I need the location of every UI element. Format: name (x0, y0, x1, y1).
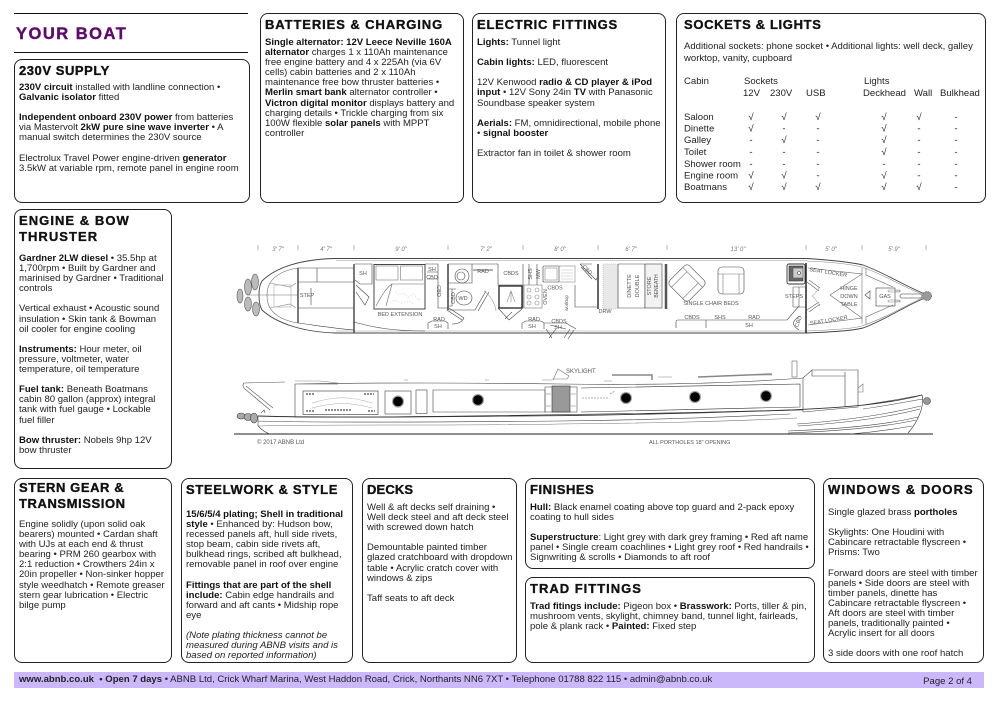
panel: 230V supply: Electrolux Travel Power engine-driven generator (19, 153, 226, 164)
panel: batteries and charging: free engine battery and 4 x 225Ah (via 6V (265, 57, 441, 68)
table: sockets and lights by cabin: 230V (770, 88, 793, 99)
panel: stern gear and transmission: stern gear lubrication • Electric (19, 590, 148, 601)
panel: steelwork and style: measured during ABNB visits and is (186, 640, 338, 651)
panel: steelwork and style: Fittings that are part of the shell (186, 580, 331, 591)
panel: stern gear and transmission: 2:1 reduction • Crowthers 24in x (19, 559, 154, 570)
panel: decks: Demountable painted timber (367, 542, 487, 553)
table: sockets and lights by cabin: - (954, 124, 958, 134)
floor plan: RAD (433, 317, 445, 323)
floor plan: SEAT LOCKER (810, 315, 848, 327)
panel: engine and bow thruster: oil cooler for engine cooling (19, 324, 135, 335)
panel: electric fittings: Soundbase speaker system (477, 98, 595, 109)
panel: engine and bow thruster: Gardner 2LW diesel • 35.5hp at (19, 253, 157, 264)
panel: engine and bow thruster: Fuel tank: Beneath Boatmans (19, 384, 148, 395)
table: sockets and lights by cabin: - (782, 147, 786, 158)
floor plan: CBDS (503, 271, 519, 277)
footer bar: www.abnb.co.uk • Open 7 days • ABNB Ltd, Crick Wharf Marina, West Haddon Road, Crick, Northants NN6 7XT • Telephone 01788 822 115 • admin@abnb.co.uk (19, 674, 712, 685)
floor plan: BED EXTENSION (378, 312, 422, 318)
panel: windows and doors: Cabincare retractable flyscreen • (828, 537, 966, 548)
table: sockets and lights by cabin: √ (916, 182, 922, 193)
panel: batteries and charging: charging details • Trickle charging from six (265, 108, 443, 119)
table: sockets and lights by cabin: √ (881, 170, 887, 182)
panel: engine and bow thruster: tank with fuel gauge • Lockable (19, 404, 151, 415)
panel: decks: Taff seats to aft deck (367, 593, 454, 604)
floor plan: DRW (598, 309, 612, 315)
table: sockets and lights by cabin: - (954, 147, 958, 158)
table: sockets and lights by cabin: - (917, 159, 921, 170)
floor plan: TABLE (840, 302, 858, 308)
table: sockets and lights by cabin: - (954, 112, 958, 123)
panel: engine and bow thruster: Vertical exhaust • Acoustic sound (19, 303, 159, 314)
panel: engine and bow thruster (14, 209, 172, 469)
panel: stern gear and transmission: with UJs at each end & thrust (19, 539, 143, 550)
side elevation: ALL PORTHOLES 18" OPENING (649, 440, 730, 446)
dimension ruler: 13' 0" (731, 247, 746, 253)
panel: trad fittings: pole & plank rack • Painted: Fixed step (530, 621, 696, 632)
table: sockets and lights by cabin: - (954, 182, 958, 193)
panel: electric fittings: 12V Kenwood radio & CD player & iPod (477, 77, 652, 88)
table: sockets and lights by cabin: USB (806, 88, 826, 99)
panel: steelwork and style: (Note plating thickness cannot be (186, 630, 327, 641)
dimension ruler: 9' 0" (395, 247, 408, 253)
title: your boat: YOUR BOAT (16, 25, 127, 43)
table: sockets and lights by cabin: - (882, 159, 886, 170)
panel: steelwork and style: bulkhead rings, scribed aft bulkhead, (186, 549, 342, 560)
panel: stern gear and transmission (14, 478, 172, 663)
floor plan: STEPS (785, 294, 803, 300)
panel: electric fittings: ELECTRIC FITTINGS (477, 17, 618, 32)
panel: engine and bow thruster: insulation • Skin tank & Bowman (19, 314, 156, 325)
panel: finishes: FINISHES (530, 482, 594, 497)
footer bar: Page 2 of 4 (923, 676, 972, 687)
footer bar (14, 672, 984, 688)
table: sockets and lights by cabin: - (782, 159, 786, 170)
panel: engine and bow thruster: temperature, oil temperature (19, 364, 139, 375)
floor plan: DOWN (840, 294, 858, 300)
table: sockets and lights by cabin: - (954, 135, 958, 146)
table: sockets and lights by cabin: - (917, 147, 921, 158)
table: sockets and lights by cabin: - (954, 170, 958, 182)
dimension ruler: 3' 7" (272, 247, 285, 253)
floor plan: RAD (477, 269, 489, 275)
panel: finishes: Hull: Black enamel coating above top guard and 2-pack epoxy (530, 502, 794, 513)
panel: trad fittings: Trad fitings include: Pigeon box • Brasswork: Ports, tiller & pin, (530, 601, 807, 612)
panel: stern gear and transmission: TRANSMISSION (19, 496, 126, 511)
panel: steelwork and style: recessed panels aft, hull side rivets, (186, 529, 337, 540)
panel: decks: with screwed down hatch (367, 522, 474, 533)
table: sockets and lights by cabin: √ (881, 147, 887, 158)
table: sockets and lights by cabin: Galley (684, 135, 711, 146)
panel: sockets and lights: worktop, vanity, cupboard (684, 53, 792, 64)
floor plan: SH (554, 325, 562, 331)
panel: stern gear and transmission: Engine solidly (upon solid oak (19, 519, 145, 530)
table: sockets and lights by cabin: - (749, 135, 753, 146)
panel: sockets and lights (676, 13, 986, 203)
table: sockets and lights by cabin: Saloon (684, 112, 714, 123)
dimension ruler: 6' 7" (625, 247, 638, 253)
panel: 230V supply: 230V SUPPLY (19, 63, 110, 78)
table: sockets and lights by cabin: √ (916, 112, 922, 123)
table: sockets and lights by cabin (684, 76, 980, 193)
panel: batteries and charging: Merlin smart bank alternator controller • (265, 87, 438, 98)
table: sockets and lights by cabin: √ (748, 112, 754, 123)
table: sockets and lights by cabin: √ (748, 170, 754, 182)
table: sockets and lights by cabin: √ (748, 124, 754, 134)
table: sockets and lights by cabin: - (816, 124, 820, 134)
panel: trad fittings: mushroom vents, skylight, chimney band, tunnel light, fairleads, (530, 611, 798, 622)
floor plan: CBD (435, 285, 441, 297)
side elevation: SKYLIGHT (566, 369, 596, 375)
floor plan: CBD (451, 292, 457, 304)
dimension ruler: 7' 2" (480, 247, 493, 253)
panel: steelwork and style (181, 478, 353, 663)
panel: stern gear and transmission: style weedhatch • Remote greaser (19, 580, 165, 591)
table: sockets and lights by cabin: - (816, 159, 820, 170)
panel: windows and doors: Cabincare retractable flyscreen • (828, 598, 966, 609)
panel: engine and bow thruster: marinised by Gardner • Traditional (19, 273, 164, 284)
dimension ruler: 5' 0" (825, 247, 838, 253)
panel: steelwork and style: forward and aft cants • Midship rope (186, 600, 338, 611)
panel: engine and bow thruster: controls (19, 283, 52, 294)
table: sockets and lights by cabin: - (917, 170, 921, 182)
panel: steelwork and style: based on reported information) (186, 650, 317, 661)
floor plan: GAS (879, 294, 891, 300)
floor plan: CBD (580, 264, 593, 277)
table: sockets and lights by cabin: - (816, 147, 820, 158)
table: sockets and lights by cabin: Wall (914, 88, 932, 99)
panel: windows and doors: panels, traditionally painted • (828, 618, 950, 629)
panel: engine and bow thruster: ENGINE & BOW (19, 213, 130, 228)
floor plan: MW (536, 268, 542, 279)
panel: batteries and charging: cells) cabin batteries and 2 x 110Ah (265, 67, 416, 78)
panel: windows and doors: Prisms: Two (828, 547, 880, 558)
panel: electric fittings: Lights: Tunnel light (477, 37, 560, 48)
dimension ruler (258, 245, 926, 253)
table: sockets and lights by cabin: Lights (864, 76, 890, 87)
table: sockets and lights by cabin: 12V (743, 88, 761, 99)
panel: electric fittings: Aerials: FM, omnidirectional, mobile phone (477, 118, 661, 129)
table: sockets and lights by cabin: √ (815, 182, 821, 193)
table: sockets and lights by cabin: Cabin (684, 76, 709, 87)
panel: batteries and charging: alternator charges 1 x 110Ah maintenance (265, 47, 448, 58)
panel: stern gear and transmission: 20in propeller • Non-sinker hopper (19, 569, 164, 580)
table: sockets and lights by cabin: - (816, 170, 820, 182)
panel: electric fittings: input • 12V Sony 24in TV with Panasonic (477, 87, 653, 98)
panel: steelwork and style: STEELWORK & STYLE (186, 482, 338, 497)
panel: windows and doors: Single glazed brass portholes (828, 507, 957, 518)
table: sockets and lights by cabin: √ (781, 112, 787, 123)
dimension ruler: 4' 7" (320, 247, 333, 253)
panel: batteries and charging: Victron digital monitor displays battery and (265, 98, 454, 109)
panel: batteries and charging: maintenance free bow thruster batteries • (265, 77, 439, 88)
panel: steelwork and style: include: Cabin edge handrails and (186, 590, 334, 601)
table: sockets and lights by cabin: Bulkhead (940, 88, 980, 99)
panel: engine and bow thruster: 1,700rpm • Built by Gardner and (19, 263, 156, 274)
panel: engine and bow thruster: pressure, voltmeter, water (19, 354, 129, 365)
panel: finishes: panel • Single cream coachlines • Light grey roof • Red handrails • (530, 542, 809, 553)
table: sockets and lights by cabin: - (782, 124, 786, 134)
panel: 230V supply: via Mastervolt 2kW pure sine wave inverter • A (19, 122, 223, 133)
table: sockets and lights by cabin: √ (881, 182, 887, 193)
panel: electric fittings: Cabin lights: LED, fluorescent (477, 57, 608, 68)
floor plan: DINETTE (627, 274, 633, 298)
table: sockets and lights by cabin: Dinette (684, 124, 714, 134)
panel: steelwork and style: eye (186, 610, 201, 621)
table: sockets and lights by cabin: Shower room (684, 159, 741, 170)
panel: engine and bow thruster: Instruments: Hour meter, oil (19, 344, 142, 355)
table: sockets and lights by cabin: √ (881, 112, 887, 123)
panel: trad fittings (525, 577, 815, 663)
table: sockets and lights by cabin: √ (748, 182, 754, 193)
floor plan: RAD (528, 317, 540, 323)
panel: electric fittings: • signal booster (477, 128, 548, 139)
panel: stern gear and transmission: bilge pump (19, 600, 66, 611)
panel: steelwork and style: removable panel in roof over engine (186, 559, 338, 570)
panel: engine and bow thruster: cabin 80 gallon (approx) integral (19, 394, 155, 405)
floor plan: SINGLE CHAIR BEDS (683, 301, 739, 307)
panel: decks: DECKS (367, 482, 413, 497)
panel: finishes (525, 478, 815, 569)
panel: finishes: Superstructure: Light grey with dark grey framing • Red aft name (530, 532, 808, 543)
table: sockets and lights by cabin: - (917, 135, 921, 146)
panel: steelwork and style: style • Enhanced by: Hudson bow, (186, 519, 333, 530)
table: sockets and lights by cabin: - (816, 135, 820, 146)
floor plan: OVEN (543, 289, 549, 305)
panel: batteries and charging (260, 13, 464, 203)
floor plan: CBDS (547, 286, 563, 292)
floor plan: CBDS (684, 315, 700, 321)
floor plan: STORE (647, 276, 653, 295)
table: sockets and lights by cabin: √ (781, 135, 787, 146)
panel: decks: Well deck steel and aft deck steel (367, 512, 509, 523)
panel: steelwork and style: stop beam, cabin side rivets aft, (186, 539, 320, 550)
panel: decks: table • Acrylic cratch cover with (367, 563, 498, 574)
floor plan: CBDS (551, 319, 567, 325)
panel: trad fittings: TRAD FITTINGS (530, 581, 642, 596)
table: sockets and lights by cabin: Deckhead (863, 88, 906, 99)
table: sockets and lights by cabin: √ (781, 170, 787, 182)
panel: batteries and charging: Single alternator: 12V Leece Neville 160A (265, 37, 452, 48)
side elevation (234, 361, 933, 446)
floor plan: CBD (794, 315, 804, 328)
floor plan: worktop (564, 295, 569, 311)
panel: 230V supply: manual switch determines the 230V source (19, 132, 202, 143)
table: sockets and lights by cabin: Sockets (744, 76, 778, 87)
side elevation: © 2017 ABNB Ltd (257, 439, 304, 446)
panel: finishes: coating to hull sides (530, 512, 614, 523)
floor plan: SHS (714, 315, 726, 321)
floor plan: SH (528, 324, 536, 330)
panel: windows and doors: Acrylic insert for all doors (828, 628, 935, 639)
table: sockets and lights by cabin: - (954, 159, 958, 170)
title: your boat (14, 13, 248, 53)
floor plan: BENEATH (654, 274, 660, 298)
floor plan: DOUBLE (635, 274, 641, 297)
floor plan: SH (745, 323, 753, 329)
panel: windows and doors: Aft doors are steel with timber (828, 608, 954, 619)
floor plan: SH (359, 271, 367, 277)
table: sockets and lights by cabin: - (749, 159, 753, 170)
floor plan: RAD (748, 315, 760, 321)
panel: windows and doors: Forward doors are steel with timber (828, 568, 978, 579)
panel: engine and bow thruster: fuel filler (19, 414, 55, 426)
panel: batteries and charging: BATTERIES & CHARGING (265, 17, 443, 32)
panel: batteries and charging: 100W flexible solar panels with MPPT (265, 118, 430, 129)
panel: 230V supply: Galvanic isolator fitted (19, 92, 119, 103)
floor plan: STEP (300, 293, 315, 299)
floor plan: SEAT LOCKER (809, 267, 847, 279)
panel: stern gear and transmission: STERN GEAR & (19, 480, 124, 495)
floor plan: HINGE (840, 286, 858, 292)
panel: 230V supply: Independent onboard 230V power from batteries (19, 112, 233, 123)
table: sockets and lights by cabin: - (917, 124, 921, 134)
floor plan: WD (458, 296, 468, 302)
panel: windows and doors (823, 478, 984, 663)
panel: windows and doors: panels • Side doors are steel with (828, 578, 969, 589)
panel: engine and bow thruster: Bow thruster: Nobels 9hp 12V (19, 435, 152, 446)
panel: steelwork and style: 15/6/5/4 plating; Shell in traditional (186, 509, 343, 520)
panel: stern gear and transmission: bearers) mounted • Cardan shaft (19, 529, 158, 540)
table: sockets and lights by cabin: Engine room (684, 170, 738, 182)
table: sockets and lights by cabin: Boatmans (684, 182, 727, 193)
panel: 230V supply: 230V circuit installed with landline connection • (19, 82, 220, 93)
table: sockets and lights by cabin: - (749, 147, 753, 158)
panel: engine and bow thruster: THRUSTER (19, 229, 98, 244)
panel: windows and doors: WINDOWS & DOORS (828, 482, 974, 497)
floor plan: SH (434, 324, 442, 330)
panel: windows and doors: timber panels, dinette has (828, 588, 937, 599)
panel: decks: Well & aft decks self draining • (367, 502, 495, 513)
dimension ruler: 8' 0" (554, 247, 567, 253)
panel: windows and doors: 3 side doors with one roof hatch (828, 648, 963, 659)
floor plan: CBD (426, 275, 438, 281)
panel: sockets and lights: SOCKETS & LIGHTS (684, 17, 822, 32)
dimension ruler: 5' 9" (888, 247, 901, 253)
table: sockets and lights by cabin: √ (815, 112, 821, 123)
table: sockets and lights by cabin: √ (881, 135, 887, 146)
floor plan (237, 258, 932, 339)
panel: sockets and lights: Additional sockets: phone socket • Additional lights: well deck, galley (684, 41, 973, 52)
panel: decks: windows & zips (367, 573, 432, 584)
panel: decks (362, 478, 517, 663)
panel: 230V supply: 3.5kW at variable rpm, remote panel in engine room (19, 163, 239, 174)
table: sockets and lights by cabin: √ (881, 124, 887, 134)
panel: decks: glazed cratchboard with dropdown (367, 552, 512, 563)
floor plan: SH (428, 267, 436, 273)
panel: batteries and charging: controller (265, 128, 304, 139)
table: sockets and lights by cabin: Toilet (684, 147, 707, 158)
panel: windows and doors: Skylights: One Houdini with (828, 527, 944, 538)
panel: engine and bow thruster: bow thruster (19, 445, 72, 456)
panel: electric fittings (472, 13, 666, 203)
floor plan: SHS (528, 268, 534, 280)
panel: finishes: Signwriting & scrolls • Diamonds to aft roof (530, 552, 710, 563)
panel: electric fittings: Extractor fan in toilet & shower room (477, 148, 631, 159)
table: sockets and lights by cabin: √ (781, 182, 787, 193)
panel: 230V supply (14, 59, 250, 203)
panel: stern gear and transmission: bearing • PRM 260 gearbox with (19, 549, 156, 560)
